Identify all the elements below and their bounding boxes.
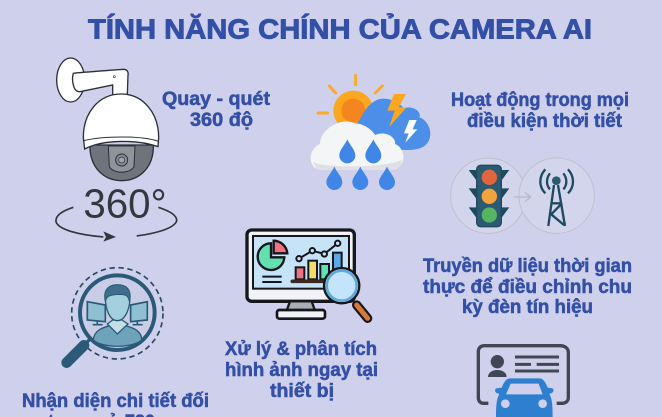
title: TÍNH NĂNG CHÍNH CỦA CAMERA AI [88,12,592,44]
icon: magnifier over person [67,268,163,363]
text: realtime data transmission [423,256,632,318]
text: all weather operation [451,90,629,132]
icon: traffic light and signal tower [451,158,594,233]
text: all weather operation: điều kiện thời tiết [467,111,623,132]
text: realtime data transmission: Truyền dữ liệu thời gian [423,256,632,277]
text: rotate and scan: 360 độ [190,110,253,131]
icon: weather [311,75,430,190]
text: on-device processing: Xử lý & phân tích [225,339,377,360]
text: detailed object recognition: Nhận diện chi tiết đối [22,391,209,412]
text: all weather operation: Hoạt động trong mọi [451,90,629,111]
icon: PTZ camera with 360 rotation [56,58,177,242]
text: rotate and scan [162,89,271,131]
icon: vehicle registration card [478,346,568,417]
text: realtime data transmission: thực để điều chỉnh chu [423,277,632,298]
text: on-device processing: thiết bị [270,381,334,402]
label: 360 degrees: 360° [83,181,167,227]
icon: monitor with analytics [247,230,368,319]
text: rotate and scan: Quay - quét [162,89,271,110]
text: on-device processing [225,339,378,402]
text: realtime data transmission: kỳ đèn tín hiệu [462,297,593,318]
text: on-device processing: hình ảnh ngay tại [225,360,378,381]
